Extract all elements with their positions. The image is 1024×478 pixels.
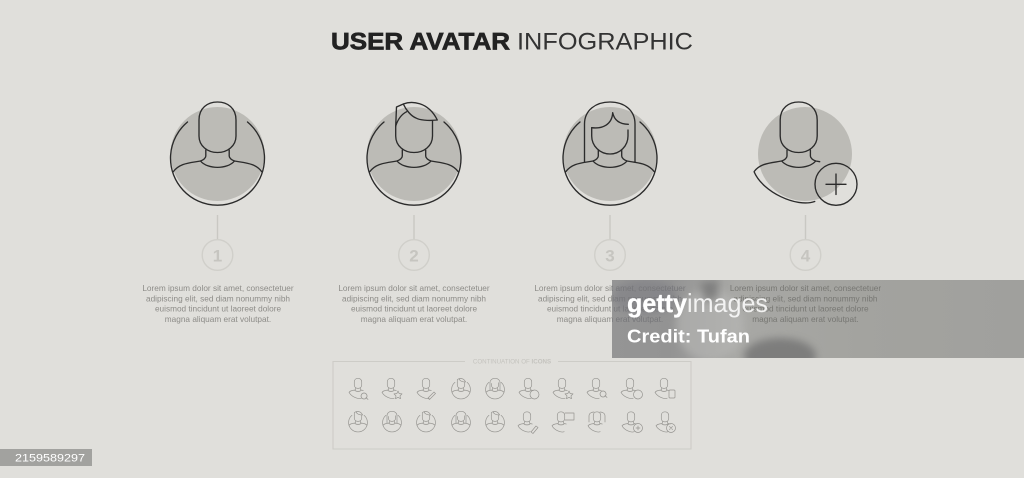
lorem text seen through the band: euismod tincidunt ut laoreet dolore <box>742 305 869 314</box>
step 4 marker <box>790 215 821 270</box>
panel caption: CONTINUATION OF ICONS <box>473 358 551 366</box>
text block 3: Lorem ipsum dolor sit amet, consectetuer <box>534 284 686 293</box>
text block 2: magna aliquam erat volutpat. <box>361 315 467 324</box>
lorem text seen through the band: adipiscing elit, sed diam nonummy nibh <box>538 294 682 303</box>
panel: continuation of icons <box>333 358 691 449</box>
text block 3: euismod tincidunt ut laoreet dolore <box>547 305 673 314</box>
text block 1: euismod tincidunt ut laoreet dolore <box>155 305 281 314</box>
title: INFOGRAPHIC <box>517 28 693 56</box>
text block 3: magna aliquam erat volutpat. <box>557 315 663 324</box>
text block 2 <box>338 284 490 324</box>
text block 1 <box>142 284 294 324</box>
avatar 3: long hair user <box>563 102 657 205</box>
lorem text seen through the band: magna aliquam erat volutpat. <box>557 315 663 324</box>
step 3 marker <box>595 215 625 270</box>
text block 2: euismod tincidunt ut laoreet dolore <box>351 305 477 314</box>
text block 1: Lorem ipsum dolor sit amet, consectetuer <box>142 284 294 293</box>
title: USER AVATAR <box>331 28 510 56</box>
watermark credit: Credit: Tufan <box>627 326 750 346</box>
step 2 marker: 2 <box>409 246 419 266</box>
image id tag <box>0 449 92 466</box>
icon grid <box>349 378 676 434</box>
avatar 2: short hair user <box>367 103 461 205</box>
text block 1: adipiscing elit, sed diam nonummy nibh <box>146 294 290 303</box>
step 2 marker <box>399 215 429 270</box>
title <box>331 28 693 56</box>
text block 1: magna aliquam erat volutpat. <box>165 315 271 324</box>
lorem text seen through the band: Lorem ipsum dolor sit amet, consectetuer <box>534 284 686 293</box>
step 3 marker: 3 <box>605 246 615 266</box>
text block 2: adipiscing elit, sed diam nonummy nibh <box>342 294 486 303</box>
text block 3 <box>534 284 686 324</box>
text block 3: adipiscing elit, sed diam nonummy nibh <box>538 294 682 303</box>
step 1 marker: 1 <box>213 246 222 266</box>
text block 2: Lorem ipsum dolor sit amet, consectetuer <box>338 284 490 293</box>
step 1 marker <box>202 215 233 270</box>
lorem text seen through the band: adipiscing elit, sed diam nonummy nibh <box>734 294 878 303</box>
avatar 4: add user <box>754 102 857 205</box>
step 4 marker: 4 <box>801 246 811 266</box>
lorem text seen through the band: Lorem ipsum dolor sit amet, consectetuer <box>730 284 881 293</box>
watermark logo: gettyimages <box>627 288 768 318</box>
avatar 1: generic user <box>170 102 264 205</box>
lorem text seen through the band: magna aliquam erat volutpat. <box>752 315 859 324</box>
image id tag: 2159589297 <box>15 452 85 464</box>
watermark band <box>612 280 1024 358</box>
lorem text seen through the band <box>612 285 881 324</box>
lorem text seen through the band: euismod tincidunt ut laoreet dolore <box>547 305 673 314</box>
